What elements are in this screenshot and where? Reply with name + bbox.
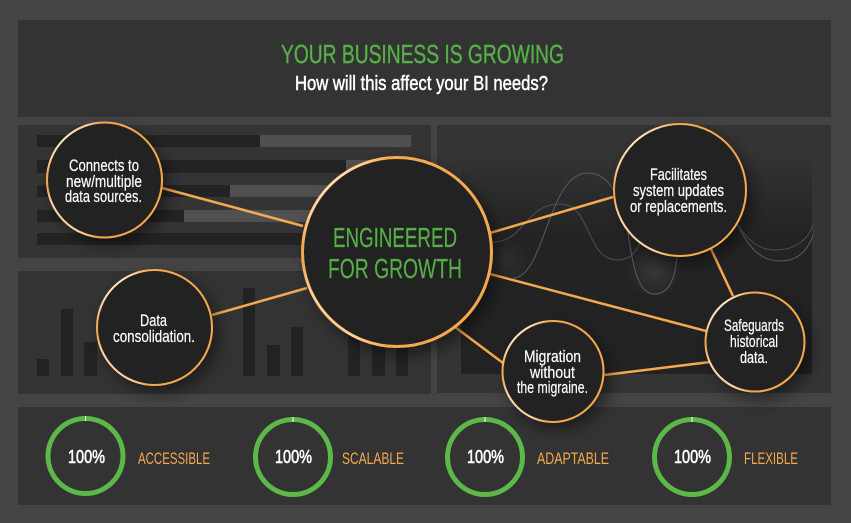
metric: adaptable (448, 417, 609, 494)
callout: safeguards historical data: historical (730, 332, 778, 351)
callout: connects to data sources: data sources. (65, 187, 142, 206)
callout: connects to data sources (47, 122, 162, 238)
callout: facilitates updates (614, 124, 746, 256)
metric: accessible (48, 416, 210, 494)
callout: migration without the migraine (502, 321, 604, 422)
hub circle: engineered for growth: FOR GROWTH (328, 253, 462, 284)
metric: accessible: 100% (68, 447, 105, 467)
callout: connects to data sources: Connects to (69, 156, 139, 175)
panel: vertical bar chart backdrop (18, 271, 431, 394)
callout: facilitates updates: Facilitates (650, 165, 707, 184)
callout: migration without the migraine: without (529, 363, 575, 382)
metric: scalable: 100% (275, 447, 312, 467)
callout: connects to data sources: new/multiple (66, 172, 142, 191)
metric: flexible (654, 417, 798, 494)
metric: flexible: FLEXIBLE (744, 449, 798, 468)
metric: scalable (256, 417, 404, 494)
callout: data consolidation: Data (140, 311, 167, 330)
subtitle: How will this affect your BI needs? (295, 72, 548, 95)
connector lines (162, 188, 733, 375)
callout: data consolidation (97, 270, 212, 385)
callout: migration without the migraine: the migraine. (517, 378, 588, 397)
callout: safeguards historical data: data. (740, 348, 768, 367)
metric: adaptable: ADAPTABLE (537, 449, 609, 468)
panel: horizontal bar chart backdrop (18, 125, 431, 258)
callout: safeguards historical data: Safeguards (724, 316, 784, 335)
panel: line chart backdrop (437, 125, 831, 393)
panel: metrics (18, 407, 831, 505)
callout: facilitates updates: or replacements. (630, 197, 727, 216)
metric: scalable: SCALABLE (342, 449, 404, 468)
callout: safeguards historical data (706, 292, 804, 392)
callout: data consolidation: consolidation. (113, 327, 195, 346)
header panel (18, 20, 831, 117)
metric: adaptable: 100% (467, 447, 504, 467)
metric: flexible: 100% (674, 447, 711, 467)
metric: accessible: ACCESSIBLE (138, 449, 210, 468)
callout: facilitates updates: system updates (633, 181, 724, 200)
hub circle: engineered for growth: ENGINEERED (333, 222, 457, 253)
title: YOUR BUSINESS IS GROWING (281, 39, 564, 69)
callout: migration without the migraine: Migration (524, 347, 581, 366)
hub circle: engineered for growth (302, 158, 492, 346)
